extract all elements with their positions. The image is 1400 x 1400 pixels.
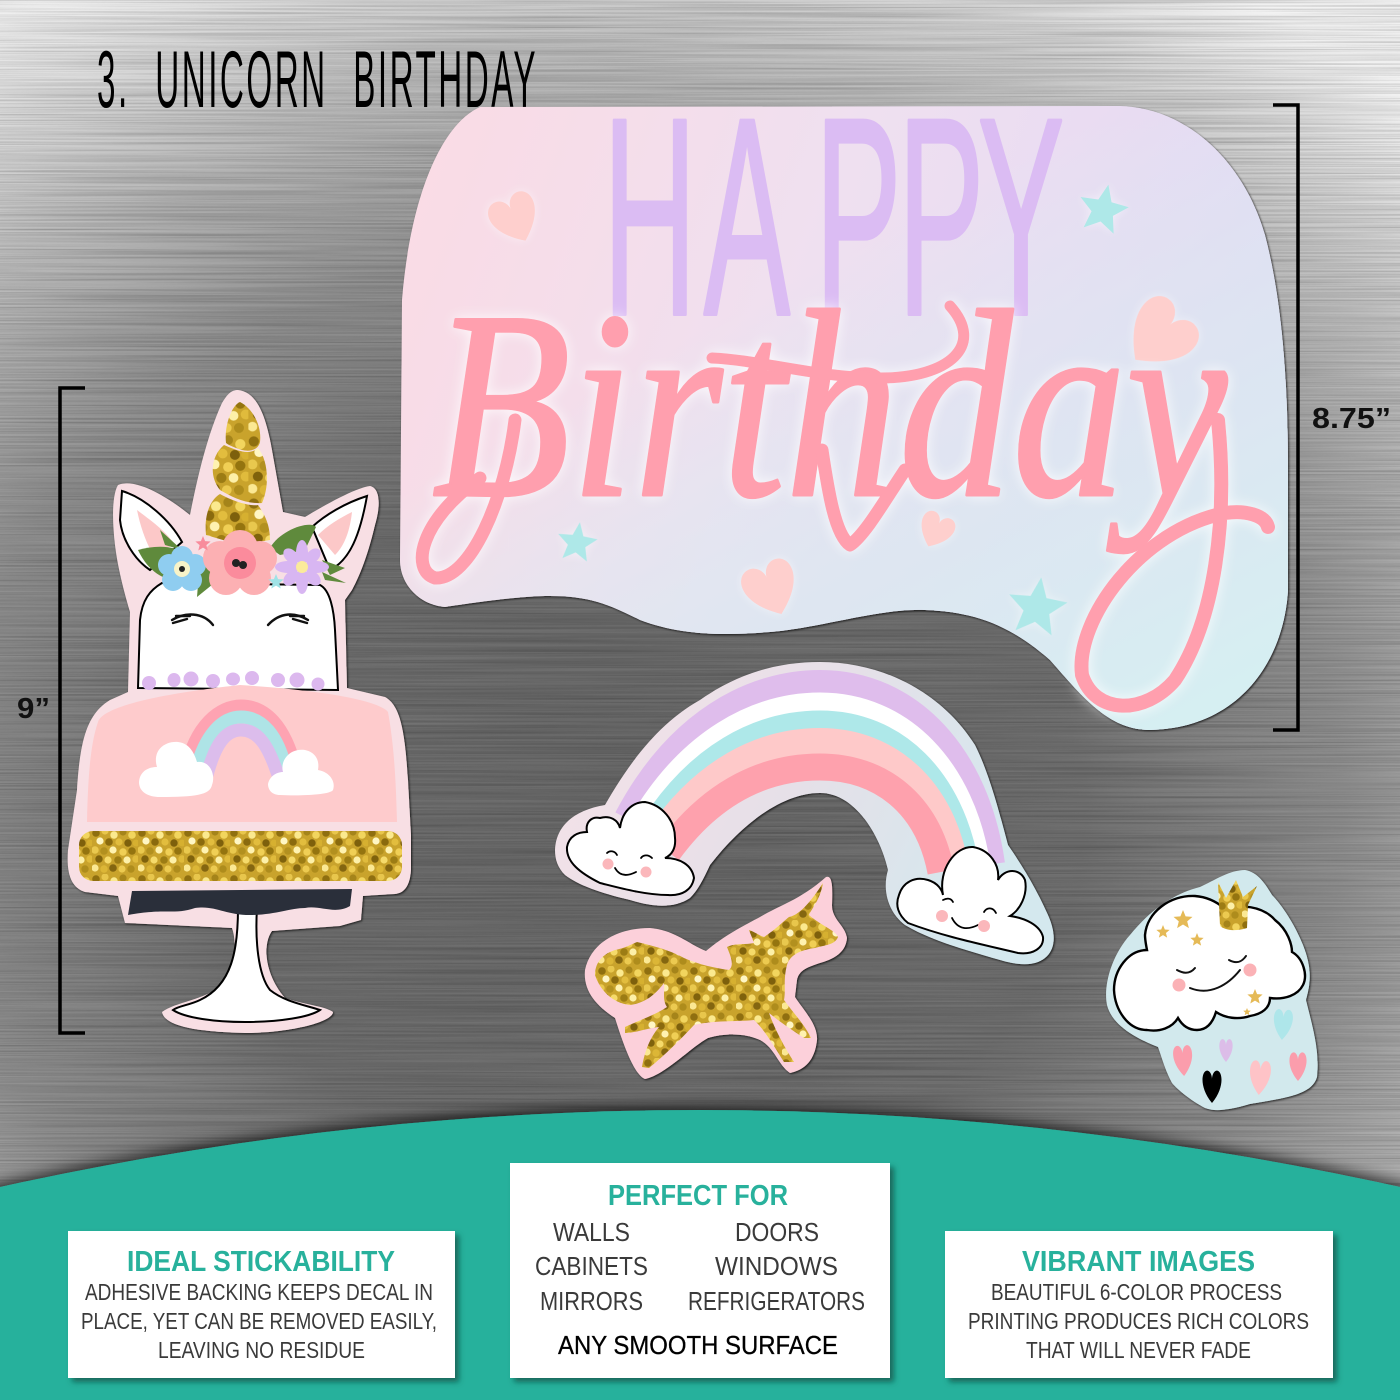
- Birthday lettering: [422, 256, 1268, 706]
- glitter unicorn silhouette: [595, 883, 838, 1068]
- stars: [555, 179, 1133, 637]
- gold glitter band: [79, 831, 402, 881]
- body text: PLACE, YET CAN BE REMOVED EASILY,: [81, 1308, 437, 1334]
- surface list: WINDOWS: [715, 1251, 838, 1281]
- right smiling cloud: [897, 847, 1043, 953]
- swash: y tail: [1081, 420, 1268, 706]
- rainbow border: [555, 662, 1054, 964]
- unicorn border: [585, 877, 847, 1079]
- teal curved footer band: [0, 1110, 1400, 1400]
- body text: [968, 1279, 1309, 1363]
- lilac flower: [275, 540, 329, 594]
- body text: BEAUTIFUL 6-COLOR PROCESS: [991, 1279, 1282, 1305]
- panel: cloud with crown sticker: [1106, 870, 1318, 1110]
- surface list: REFRIGERATORS: [688, 1286, 865, 1316]
- bracket: 8.75 in: [1273, 105, 1298, 730]
- heading: IDEAL STICKABILITY: [127, 1246, 395, 1278]
- body text: ADHESIVE BACKING KEEPS DECAL IN: [85, 1279, 433, 1305]
- sleepy face: [1177, 956, 1246, 991]
- Birthday lettering: Birthday: [432, 256, 1229, 554]
- eyelashes: [172, 615, 308, 625]
- body text: LEAVING NO RESIDUE: [158, 1337, 365, 1363]
- surface list: DOORS: [735, 1217, 819, 1247]
- lilac beads: [142, 671, 324, 690]
- cake border: [68, 390, 411, 1033]
- panel: vibrant images: [945, 1231, 1333, 1378]
- gold stars: [1156, 910, 1263, 1015]
- bracket: 9 in: [60, 388, 85, 1033]
- panel: perfect for: [510, 1163, 890, 1378]
- surface list: [535, 1217, 865, 1316]
- panel: rainbow sticker: [555, 662, 1054, 964]
- stand: [173, 908, 320, 1022]
- ears: [120, 491, 367, 570]
- crown: [1218, 880, 1257, 930]
- heading: VIBRANT IMAGES: [1022, 1246, 1255, 1278]
- swash: B loop: [422, 420, 515, 578]
- hearts: [484, 187, 1206, 624]
- decal shape: [400, 106, 1288, 730]
- panel: ideal stickability: [68, 1231, 455, 1378]
- blue flower: [158, 546, 206, 591]
- flower crown: [138, 525, 346, 597]
- surface list: CABINETS: [535, 1251, 648, 1281]
- HAPPY lettering: HAPPY: [603, 61, 1064, 374]
- swash: t crossbar: [712, 306, 964, 378]
- plate: [128, 889, 352, 915]
- horn: [206, 402, 270, 545]
- panel: glitter unicorn sticker: [585, 877, 847, 1079]
- any smooth surface: ANY SMOOTH SURFACE: [558, 1330, 838, 1360]
- heading: PERFECT FOR: [608, 1180, 788, 1212]
- body text: THAT WILL NEVER FADE: [1026, 1337, 1251, 1363]
- panel: happy birthday decal: [400, 61, 1288, 730]
- white cloud: [1114, 896, 1305, 1030]
- body text: [81, 1279, 437, 1363]
- left smiling cloud: [567, 802, 694, 895]
- pink flower: [203, 530, 277, 595]
- cheeks: [1172, 964, 1256, 992]
- text: 3. UNICORN BIRTHDAY: [97, 35, 538, 125]
- head: [138, 583, 338, 690]
- label: 8.75 in: 8.75”: [1312, 403, 1391, 435]
- label: 9 in: 9”: [17, 693, 50, 725]
- panel: unicorn cake sticker: [68, 390, 411, 1033]
- surface list: MIRRORS: [540, 1286, 643, 1316]
- rainbow bands: [626, 682, 993, 872]
- small hearts: [1173, 1009, 1307, 1103]
- cake tier: [87, 685, 397, 822]
- cake rainbow: [186, 706, 296, 775]
- swash: h tail: [822, 450, 905, 545]
- cake clouds: [139, 742, 334, 797]
- body text: PRINTING PRODUCES RICH COLORS: [968, 1308, 1309, 1334]
- cloud sticker border: [1106, 870, 1318, 1110]
- surface list: WALLS: [553, 1217, 630, 1247]
